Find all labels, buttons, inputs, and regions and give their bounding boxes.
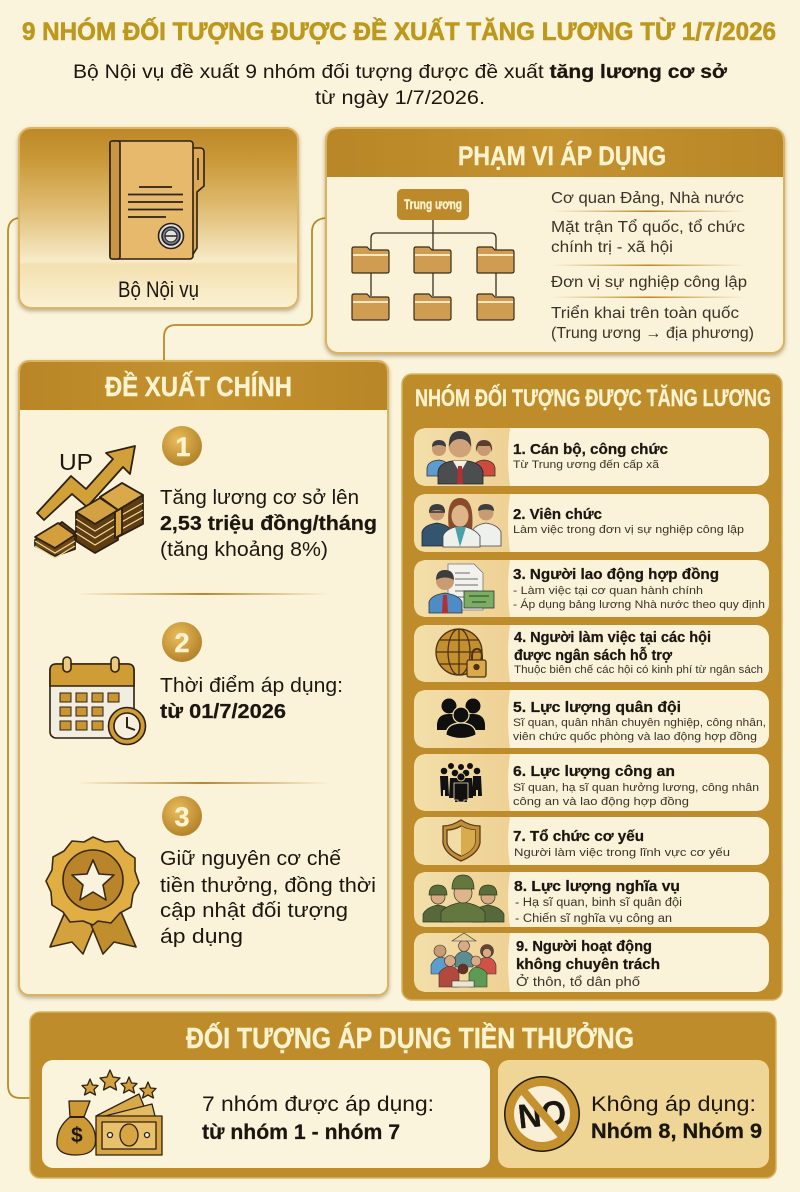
number 3: [162, 796, 202, 836]
text: - Chiến sĩ nghĩa vụ công an: [515, 913, 672, 925]
item 3: [46, 796, 376, 954]
scope list: [551, 190, 754, 342]
icon: contract worker: [429, 564, 494, 613]
row 8: [414, 872, 769, 927]
icon: public employees: [422, 498, 501, 547]
text 2: [160, 675, 343, 723]
card: 7 nhóm được áp dụng: [42, 1060, 490, 1168]
text: [513, 566, 765, 611]
row 7: [414, 817, 769, 865]
heading: ĐỀ XUẤT CHÍNH: [105, 371, 292, 402]
text 3: áp dụng: [160, 926, 243, 948]
text: 1. Cán bộ, công chức: [513, 441, 668, 458]
text: được ngân sách hỗ trợ: [514, 647, 672, 664]
text: Không áp dụng:: [591, 1093, 756, 1116]
text 1: [160, 487, 377, 561]
text: [514, 878, 682, 925]
text: Sĩ quan, hạ sĩ quan hưởng lương, công nhân: [513, 782, 759, 794]
number 1: [162, 426, 202, 466]
text: 3. Người lao động hợp đồng: [513, 566, 719, 583]
row 3: [414, 560, 769, 617]
icon: up arrow and money: UP: [59, 449, 93, 475]
text: Làm việc trong đơn vị sự nghiệp công lập: [513, 524, 744, 536]
text: [516, 938, 660, 989]
text: từ nhóm 1 - nhóm 7: [202, 1121, 400, 1144]
text 1: Tăng lương cơ sở lên: [160, 487, 359, 509]
icon: money bag and bills: $: [71, 1124, 83, 1147]
number 3: 3: [174, 802, 190, 832]
text: 8. Lực lượng nghĩa vụ: [514, 878, 680, 895]
org chart: Trung ương: [404, 197, 462, 212]
text 2: từ 01/7/2026: [160, 701, 286, 723]
icon: award rosette: [46, 837, 139, 954]
icon: soldiers: [423, 875, 504, 922]
text 3: cập nhật đối tượng: [160, 900, 348, 922]
text: 5. Lực lượng quân đội: [513, 699, 681, 716]
panel: phạm vi áp dụng: [326, 128, 784, 353]
text 1: 2,53 triệu đồng/tháng: [160, 513, 377, 535]
panel: Bộ Nội vụ: [19, 128, 298, 308]
text: 9. Người hoạt động: [516, 938, 652, 955]
icon: calendar and clock: [50, 657, 146, 744]
text: - Hạ sĩ quan, binh sĩ quân đội: [515, 897, 682, 909]
icon: shield: [443, 820, 480, 861]
text: [514, 629, 763, 676]
text 3: [160, 848, 376, 948]
text: Người làm việc trong lĩnh vực cơ yếu: [514, 847, 730, 859]
text: [513, 699, 766, 743]
text: Thuộc biên chế các hội có kinh phí từ ngân sách: [514, 664, 763, 676]
number 2: [162, 622, 202, 662]
text: Sĩ quan, quân nhân chuyên nghiệp, công nhân,: [513, 717, 766, 729]
icon: document folder: [110, 141, 204, 259]
text: [513, 763, 759, 808]
subtitle: từ ngày 1/7/2026.: [315, 88, 485, 109]
scope list: Triển khai trên toàn quốc: [551, 305, 739, 322]
icon: up arrow and money: [35, 446, 143, 558]
text: Ở thôn, tổ dân phố: [516, 974, 640, 989]
text: 6. Lực lượng công an: [513, 763, 675, 780]
row 1: [414, 428, 769, 486]
icon: money bag and bills: [57, 1070, 162, 1155]
connector lines: [8, 218, 326, 1098]
row 2: [414, 494, 769, 552]
heading: ĐỐI TƯỢNG ÁP DỤNG TIỀN THƯỞNG: [186, 1021, 634, 1055]
row 6: [414, 754, 769, 811]
text: [591, 1093, 762, 1143]
text: Từ Trung ương đến cấp xã: [513, 459, 660, 471]
text: - Làm việc tại cơ quan hành chính: [513, 585, 703, 597]
text 3: tiền thưởng, đồng thời: [160, 875, 376, 897]
text: không chuyên trách: [516, 956, 660, 973]
panel: nhóm đối tượng được tăng lương: [402, 374, 782, 1000]
text: [513, 828, 730, 859]
text: 2. Viên chức: [513, 506, 602, 523]
scope list: (Trung ương → địa phương): [551, 325, 754, 342]
heading: PHẠM VI ÁP DỤNG: [458, 140, 666, 171]
icon: police crowd: [440, 763, 482, 802]
text: [202, 1093, 434, 1144]
panel: đối tượng áp dụng tiền thưởng: [30, 1012, 776, 1178]
text: viên chức quốc phòng và lao động hợp đồng: [513, 731, 757, 743]
text 1: (tăng khoảng 8%): [160, 539, 328, 561]
icon: community workers: [431, 933, 496, 987]
icon: no sign: NO: [516, 1094, 568, 1136]
label: Bộ Nội vụ: Bộ Nội vụ: [118, 277, 199, 302]
text 3: Giữ nguyên cơ chế: [160, 848, 341, 870]
text: [513, 506, 744, 536]
number 1: 1: [176, 432, 191, 462]
scope list: chính trị - xã hội: [551, 239, 673, 256]
scope list: Mặt trận Tổ quốc, tổ chức: [551, 219, 745, 236]
text: - Áp dụng bảng lương Nhà nước theo quy định: [513, 598, 765, 611]
row 4: [414, 625, 769, 682]
text 2: Thời điểm áp dụng:: [160, 675, 343, 697]
card: không áp dụng: [498, 1060, 769, 1168]
row 9: [414, 933, 769, 992]
title: 9 NHÓM ĐỐI TƯỢNG ĐƯỢC ĐỀ XUẤT TĂNG LƯƠNG TỪ 1/7/2026: [22, 16, 776, 46]
text: [513, 441, 668, 471]
item 2: [50, 622, 343, 744]
icon: no sign: [504, 1076, 580, 1152]
text: 7 nhóm được áp dụng:: [202, 1093, 434, 1116]
text: công an và lao động hợp đồng: [513, 796, 689, 808]
text: 4. Người làm việc tại các hội: [514, 629, 711, 646]
item 1: [35, 426, 377, 561]
icon: globe and lock: [436, 629, 486, 677]
text: Nhóm 8, Nhóm 9: [591, 1120, 762, 1143]
panel: đề xuất chính: [19, 361, 388, 995]
org chart: [352, 189, 514, 320]
number 2: 2: [174, 628, 190, 658]
row 5: [414, 690, 769, 748]
icon: military group: [437, 698, 485, 738]
scope list: Cơ quan Đảng, Nhà nước: [551, 190, 744, 207]
scope list: Đơn vị sự nghiệp công lập: [551, 274, 747, 291]
text: 7. Tổ chức cơ yếu: [513, 828, 644, 845]
subtitle: [73, 62, 728, 109]
subtitle: Bộ Nội vụ đề xuất 9 nhóm đối tượng được đề xuất tăng lương cơ sở: [73, 62, 728, 83]
icon: officials: [427, 431, 495, 484]
